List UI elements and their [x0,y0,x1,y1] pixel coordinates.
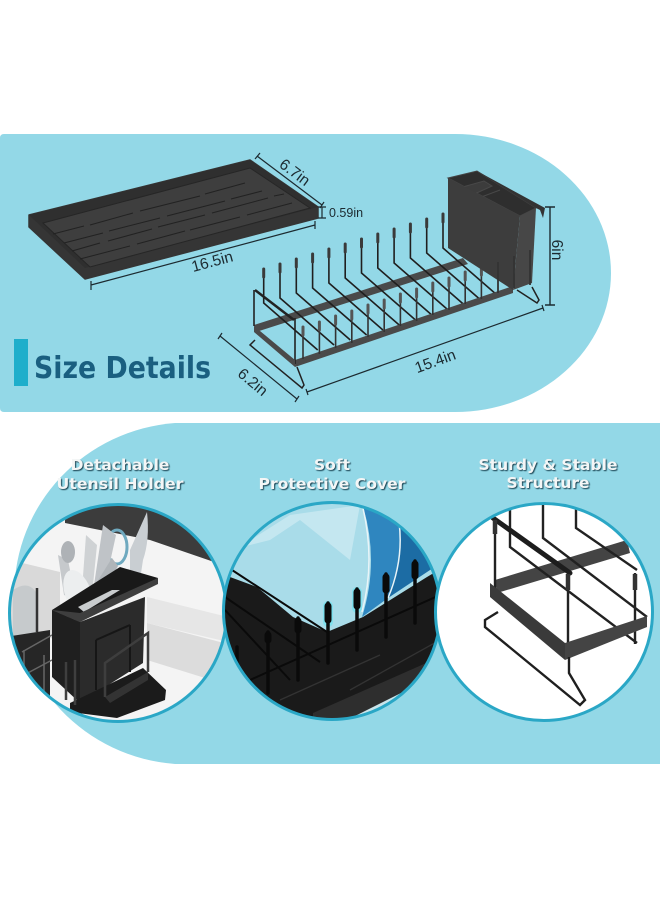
tines [237,561,415,693]
dimension: tray length 16.5in: 16.5in [190,248,235,276]
heading: sturdy and stable structure: Sturdy & Stable [478,456,618,474]
holder opening and rim [52,567,158,622]
grey wall blocks [10,560,60,640]
dimension: rack height 6in: 6in [548,240,565,260]
wires [495,500,647,644]
dimension: tray width 6.7in [255,153,324,208]
dish rack [250,214,539,388]
small rack at left [14,630,50,696]
dimension: tray height 0.59in: 0.59in [329,206,363,220]
cutlery [58,512,148,596]
glass at left [13,585,36,640]
foot [485,612,585,705]
panel: features background [14,423,660,764]
dimension: rack depth 6.2in [218,333,299,402]
holder faces [52,610,80,703]
dimension: tray width 6.7in: 6.7in [276,156,313,190]
back band [495,540,630,593]
photo circle: protective cover [220,498,446,730]
panel: size details background [0,134,611,412]
dimension: tray length 16.5in [91,221,315,290]
holder base tray [70,668,166,718]
utensil holder [448,171,545,293]
rack back tine tips [264,214,443,277]
rack front band [295,286,513,367]
heading: detachable utensil holder second line: Utensil Holder [56,475,184,493]
dark counter band [65,506,212,562]
heading: size details [14,339,211,386]
rack front tine tips [303,267,481,335]
photo circle: sturdy structure [436,500,652,720]
heading: soft protective cover: Soft [314,456,351,474]
heading: soft protective cover second line: Protective Cover [258,475,406,493]
front right band [565,616,647,660]
rack back tines [264,215,497,350]
front left band [490,583,565,660]
rack left frame and feet [250,287,539,388]
drip tray [29,160,318,279]
dimension: rack length 15.4in [306,305,544,395]
glow around covers [328,592,357,622]
heading: size details: Size Details [34,351,211,386]
heading: detachable utensil holder: Detachable [71,456,169,474]
photo circle: utensil holder [8,503,226,723]
post ferrules [495,520,635,590]
rack back band [254,258,468,332]
dark base [225,574,436,716]
dimension: rack length 15.4in: 15.4in [413,347,458,377]
rack front tines [303,266,481,359]
heading: sturdy and stable structure second line: Structure [506,474,590,492]
thick top bar [493,518,570,573]
dimension: rack height 6in [545,207,565,305]
dimension: rack depth 6.2in: 6.2in [234,365,271,400]
